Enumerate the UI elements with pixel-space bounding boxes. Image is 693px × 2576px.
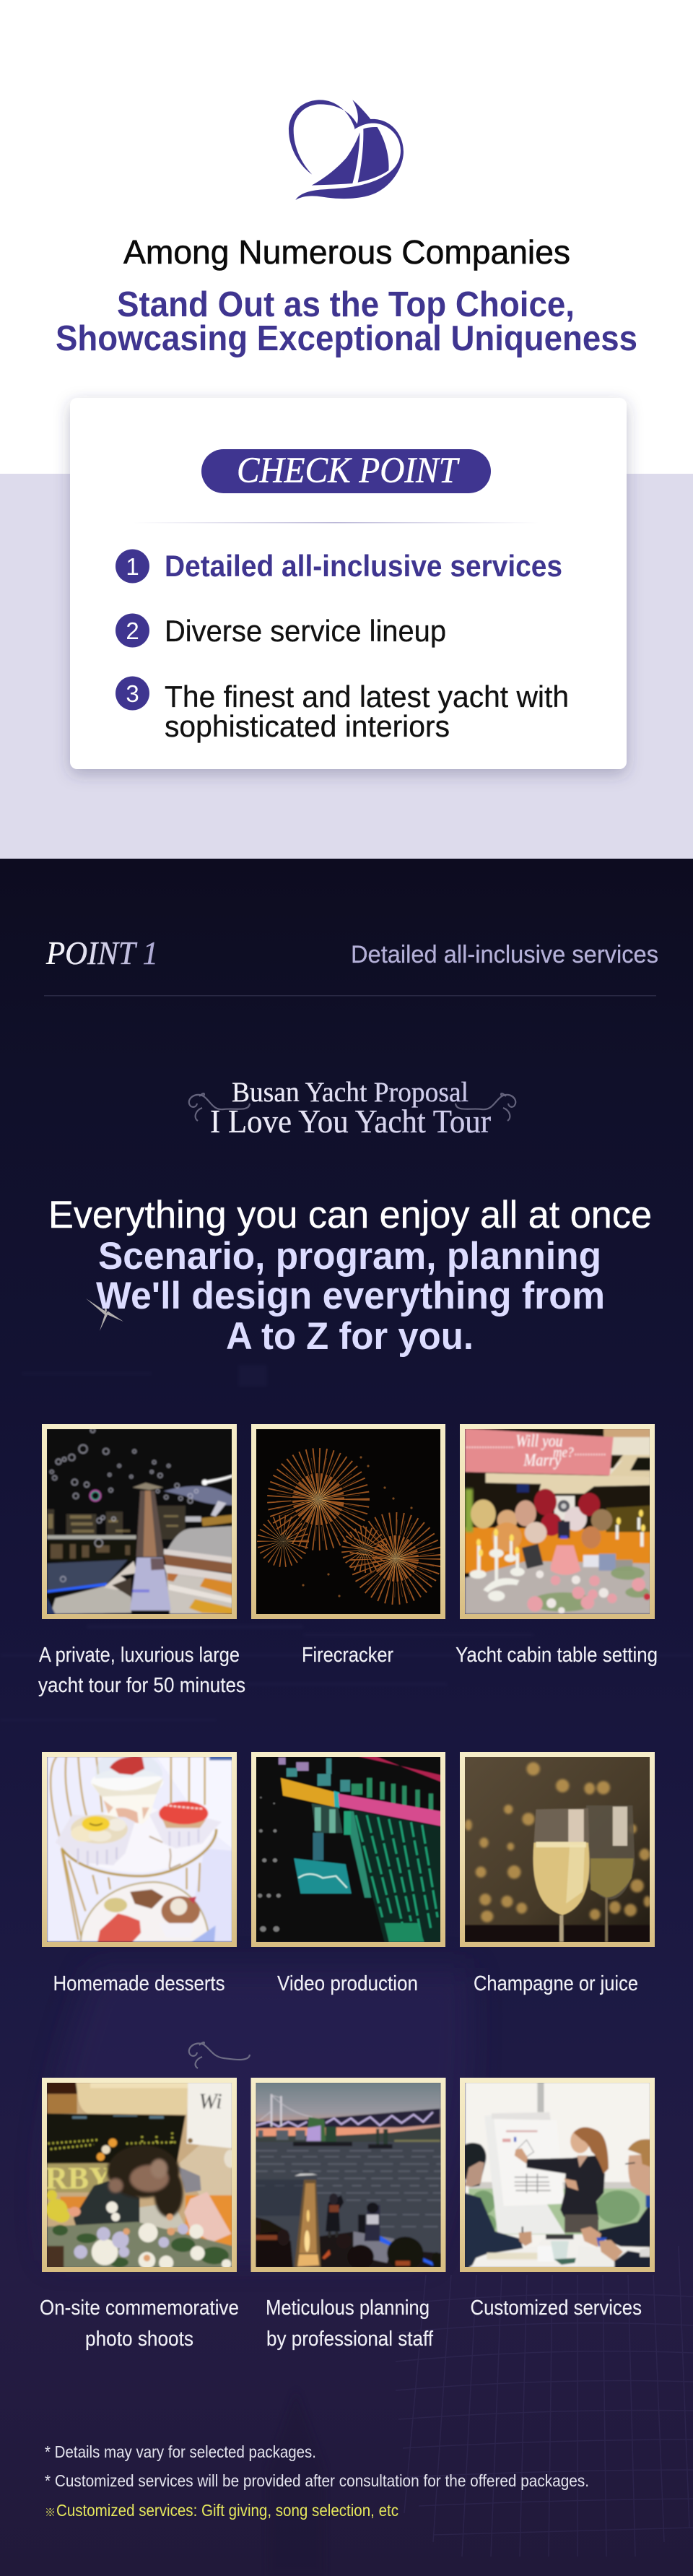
footnotes (45, 2442, 589, 2520)
caption: row 1: Yacht cabin table setting (456, 1644, 658, 1667)
logo: heart sailboat (289, 100, 404, 200)
caption: row 3 (40, 2297, 642, 2351)
title: busan yacht proposal: I Love You Yacht Tour (210, 1103, 491, 1140)
photo: on-site photo shoot: Wi (199, 2089, 222, 2114)
headline block: Everything you can enjoy all at once (48, 1194, 652, 1236)
caption: row 3: On-site commemorative (40, 2297, 239, 2320)
heading: stand out: Stand Out as the Top Choice, (117, 285, 575, 324)
check point pill: CHECK POINT (237, 451, 460, 491)
photo: on-site photo shoot (45, 2080, 237, 2270)
heading: stand out (56, 285, 637, 358)
heading: among numerous companies: Among Numerous Companies (123, 233, 570, 271)
gold frame (254, 1427, 443, 1616)
gold frame (45, 1755, 234, 1944)
item 3 (116, 676, 569, 743)
photo: cabin table setting: Will you (515, 1432, 563, 1451)
photo: customized services presentation (462, 2080, 653, 2269)
caption: row 1 (38, 1644, 658, 1697)
photo: cabin table setting: Marry (523, 1452, 561, 1470)
headline block: We'll design everything from (96, 1275, 605, 1317)
photo: on-site photo shoot: RBY (45, 2161, 111, 2196)
photo: cabin table setting (462, 1427, 653, 1616)
caption: row 1: Firecracker (302, 1644, 393, 1667)
ornament: flourish (189, 2042, 250, 2068)
item 2: Diverse service lineup (165, 614, 446, 648)
headline block (48, 1194, 652, 1358)
caption: row 2: Champagne or juice (474, 1972, 638, 1995)
point 1 header (44, 934, 658, 997)
photo: video editing timeline (254, 1755, 443, 1944)
photo: yacht at night with bubbles (45, 1427, 234, 1616)
photo: champagne glasses (462, 1755, 653, 1944)
caption: row 1: yacht tour for 50 minutes (38, 1674, 245, 1697)
caption: row 1: A private, luxurious large (39, 1644, 240, 1667)
item 3: sophisticated interiors (165, 709, 450, 743)
gold frame (462, 2080, 653, 2269)
gold frame (45, 2080, 234, 2269)
footnotes: Customized services: Gift giving, song selection, etc (56, 2501, 398, 2520)
icon: sparkle (86, 1298, 123, 1331)
point 1 header: POINT 1 (45, 934, 158, 971)
title: busan yacht proposal (210, 1077, 491, 1140)
caption: row 3: Customized services (471, 2297, 642, 2320)
footnotes: * Details may vary for selected packages. (45, 2442, 316, 2461)
photo: bridge and staff (253, 2080, 443, 2270)
caption: row 2: Video production (277, 1972, 418, 1995)
gold frame (254, 1755, 443, 1944)
item 3: 3 (126, 680, 139, 707)
footnotes: ※ (45, 2507, 56, 2519)
lavender band (0, 474, 693, 859)
headline block: Scenario, program, planning (98, 1235, 601, 1278)
photo: fireworks (254, 1427, 443, 1616)
title: busan yacht proposal: Busan Yacht Proposal (232, 1077, 468, 1108)
photo: cabin table setting: me? (553, 1444, 574, 1460)
gold frame (462, 1755, 653, 1944)
gold frame (45, 1427, 234, 1616)
heading: stand out: Showcasing Exceptional Uniqueness (56, 319, 637, 358)
caption: row 3: Meticulous planning (266, 2297, 430, 2320)
caption: row 2 (53, 1972, 638, 1995)
caption: row 2: Homemade desserts (53, 1972, 225, 1995)
caption: row 3: photo shoots (85, 2328, 193, 2351)
caption: row 3: by professional staff (266, 2328, 434, 2351)
item 1: Detailed all-inclusive services (165, 549, 562, 583)
dark section background (0, 859, 693, 2576)
point 1 header: Detailed all-inclusive services (351, 941, 658, 968)
ornament: title flourishes (189, 1093, 515, 1121)
panel: check point card (70, 398, 627, 769)
gold frame (253, 2080, 443, 2269)
footnotes: * Customized services will be provided after consultation for the offered packages. (45, 2471, 589, 2490)
item 3: The finest and latest yacht with (165, 680, 569, 714)
item 1: 1 (126, 553, 139, 580)
item 2: 2 (126, 617, 139, 644)
page background: white top (0, 0, 693, 474)
photo: homemade desserts (45, 1755, 234, 1944)
gold frame (462, 1427, 653, 1616)
headline block: A to Z for you. (226, 1315, 474, 1358)
